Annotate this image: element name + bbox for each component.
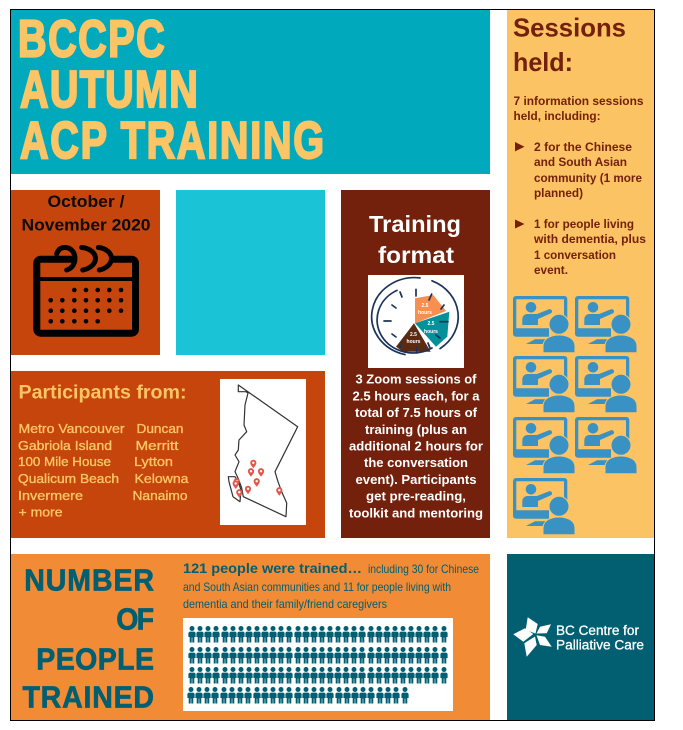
training format description: training (plus an bbox=[365, 423, 467, 437]
date heading bbox=[22, 192, 150, 234]
panel: date bbox=[11, 190, 160, 355]
bullet: dementia sessions: 1 conversation bbox=[534, 248, 616, 262]
participant locations list: Lytton bbox=[134, 454, 173, 469]
bullet: Chinese and South Asian sessions: and South Asian bbox=[534, 155, 627, 169]
date heading: November 2020 bbox=[22, 216, 150, 234]
participant locations list: 100 Mile House bbox=[18, 454, 111, 469]
icon: calendar bbox=[37, 248, 135, 333]
number heading: TRAINED bbox=[22, 680, 154, 715]
title text bbox=[18, 9, 324, 169]
panel: BC Centre for Palliative Care bbox=[507, 554, 654, 720]
number heading: NUMBER bbox=[24, 563, 154, 598]
bullet: dementia sessions: event. bbox=[534, 263, 568, 277]
number description: dementia and their family/friend caregivers bbox=[183, 597, 387, 611]
logo text bbox=[556, 623, 644, 652]
number heading: PEOPLE bbox=[36, 642, 154, 677]
training format description: 2.5 hours each, for a bbox=[352, 390, 481, 404]
participant locations list: Invermere bbox=[18, 488, 83, 503]
number heading: OF bbox=[116, 602, 154, 637]
participant locations list: Metro Vancouver bbox=[18, 421, 125, 436]
panel: cyan block bbox=[176, 190, 325, 355]
icon: clock pie chart: 2.5 bbox=[410, 332, 417, 338]
map of British Columbia bbox=[220, 379, 306, 525]
bullet: Chinese and South Asian sessions: planned) bbox=[534, 186, 583, 200]
bullet: dementia sessions: with dementia, plus bbox=[533, 232, 646, 246]
pictogram: 121 people bbox=[183, 618, 453, 711]
training format description bbox=[349, 373, 483, 521]
number description bbox=[183, 560, 479, 611]
bullet: dementia sessions: 1 for people living bbox=[534, 217, 634, 231]
participant locations list bbox=[18, 421, 189, 520]
number heading bbox=[22, 563, 154, 715]
participant locations list: Kelowna bbox=[134, 471, 189, 486]
participant locations list: Duncan bbox=[136, 421, 184, 436]
icon: clock pie chart: 2.5 bbox=[422, 303, 429, 309]
logo: white star bbox=[513, 617, 552, 657]
training format description: event). Participants bbox=[356, 473, 477, 487]
training format heading: format bbox=[378, 242, 454, 268]
participant locations list: Nanaimo bbox=[132, 488, 188, 503]
bullet: Chinese and South Asian sessions: community (1 more bbox=[534, 171, 642, 185]
panel: title bbox=[11, 9, 490, 174]
icon: clock pie chart: hours bbox=[424, 329, 438, 335]
title text: AUTUMN bbox=[20, 60, 198, 118]
sessions heading: Sessions bbox=[513, 13, 626, 43]
number description: and South Asian communities and 11 for people living with bbox=[183, 580, 451, 594]
title text: ACP TRAINING bbox=[20, 111, 324, 169]
icon: clock pie chart bbox=[368, 275, 464, 368]
training format description: 3 Zoom sessions of bbox=[356, 373, 477, 387]
number description: including 30 for Chinese bbox=[368, 562, 479, 576]
panel: sessions held bbox=[507, 10, 654, 538]
participant locations list: + more bbox=[18, 504, 62, 520]
sessions summary: held, including: bbox=[514, 109, 600, 123]
training format heading: Training bbox=[369, 211, 461, 237]
participant locations list: Qualicum Beach bbox=[18, 471, 119, 486]
bullet: Chinese and South Asian sessions: 2 for the Chinese bbox=[534, 140, 632, 154]
participant locations list: Merritt bbox=[136, 438, 179, 453]
icons: seven presenter screens bbox=[513, 296, 637, 535]
training format description: toolkit and mentoring bbox=[349, 507, 483, 521]
date heading: October / bbox=[48, 192, 125, 211]
bullet: Chinese and South Asian sessions bbox=[515, 140, 642, 200]
sessions summary: 7 information sessions bbox=[514, 94, 644, 108]
sessions summary bbox=[514, 94, 644, 123]
bullet: dementia sessions bbox=[515, 217, 646, 277]
training format description: total of 7.5 hours of bbox=[355, 406, 478, 420]
panel: participants bbox=[11, 371, 325, 538]
icon: clock pie chart: hours bbox=[418, 310, 432, 316]
panel: number of people trained bbox=[11, 554, 490, 720]
sessions heading: held: bbox=[513, 47, 573, 77]
title text: BCCPC bbox=[18, 9, 165, 68]
training format heading bbox=[369, 211, 461, 268]
icon: clock pie chart: hours bbox=[407, 339, 421, 345]
training format description: get pre-reading, bbox=[366, 490, 466, 504]
participants heading: Participants from: bbox=[18, 382, 186, 404]
training format description: additional 2 hours for bbox=[349, 440, 483, 454]
sessions heading bbox=[513, 13, 626, 77]
icon: clock pie chart: 2.5 bbox=[428, 321, 435, 327]
training format description: the conversation bbox=[364, 456, 468, 470]
logo text: Palliative Care bbox=[556, 638, 644, 652]
logo text: BC Centre for bbox=[556, 623, 640, 638]
participant locations list: Gabriola Island bbox=[18, 438, 112, 453]
panel: training format bbox=[341, 190, 490, 538]
number description: 121 people were trained… bbox=[183, 560, 362, 576]
